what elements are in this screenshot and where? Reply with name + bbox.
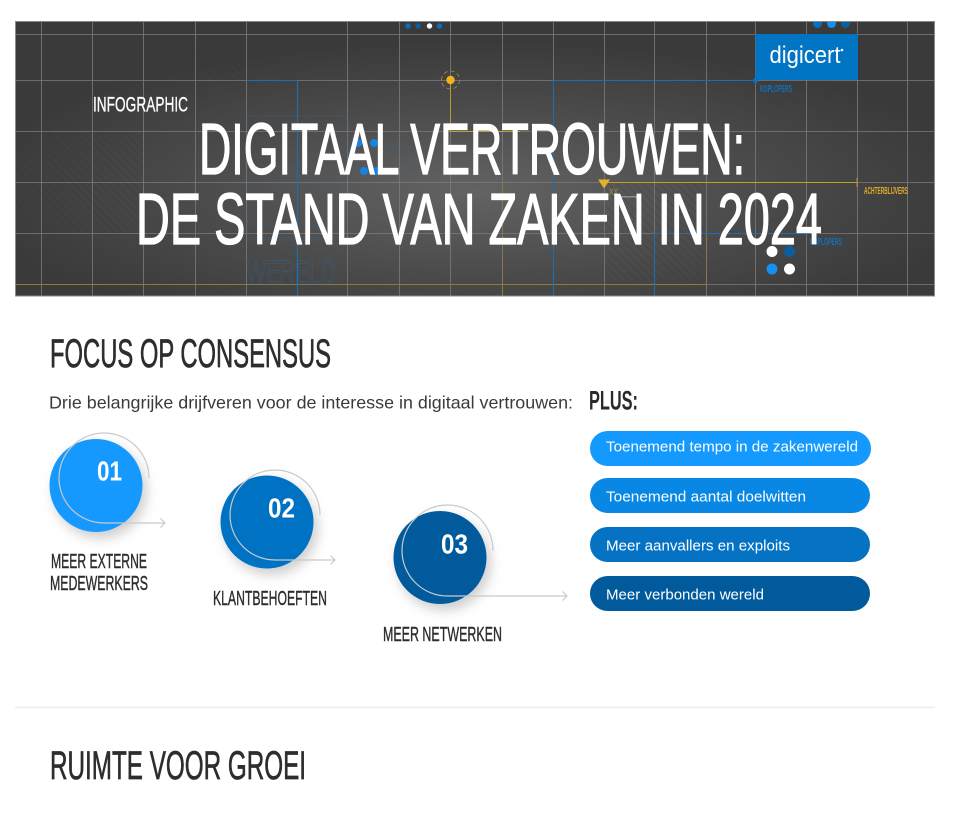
label: meer externe medewerkers <box>50 551 148 595</box>
icon: yellow target marker <box>442 71 460 89</box>
top pagination dots <box>405 23 442 29</box>
banner kicker: INFOGRAPHIC <box>93 94 188 116</box>
bottom right dots <box>766 246 795 274</box>
pill: meer aanvallers <box>590 527 870 562</box>
heading: focus op consensus: FOCUS OP CONSENSUS <box>50 332 331 376</box>
pill: meer verbonden wereld <box>590 576 870 611</box>
label: meer externe medewerkers: MEER EXTERNE <box>51 551 147 573</box>
intro text: Drie belangrijke drijfveren voor de interesse in digitaal vertrouwen: <box>49 392 573 412</box>
driver 01 <box>50 433 165 595</box>
driver 03 <box>383 505 567 646</box>
icon: yellow warning triangle <box>598 180 637 198</box>
faint outlined background words: WERELD <box>246 254 336 292</box>
pill: meer aanvallers: Meer aanvallers en exploits <box>606 538 790 554</box>
header banner: ACHTERBLIJVERS <box>864 186 908 197</box>
pill: toenemend aantal doelwitten: Toenemend aantal doelwitten <box>606 488 806 506</box>
heading: ruimte voor groei: RUIMTE VOOR GROEI <box>50 744 306 788</box>
label: klantbehoeften: KLANTBEHOEFTEN <box>213 588 327 610</box>
pill: toenemend tempo: Toenemend tempo in de zakenwereld <box>606 438 858 456</box>
label: koplopers: KOPLOPERS <box>760 84 792 95</box>
logo: digicert <box>753 34 858 83</box>
driver 03: 03 <box>441 528 468 560</box>
banner title <box>136 110 822 260</box>
pill: toenemend aantal doelwitten <box>590 478 870 513</box>
label: koplopers lower: KOPLOPERS <box>810 237 842 248</box>
logo: digicert: digicert <box>770 42 841 69</box>
label: meer externe medewerkers: MEDEWERKERS <box>50 573 148 595</box>
label: meer netwerken: MEER NETWERKEN <box>383 624 502 646</box>
top right dots <box>813 22 850 28</box>
heading: plus: PLUS: <box>589 386 638 416</box>
driver 02: 02 <box>268 492 295 524</box>
driver 01: 01 <box>97 456 122 486</box>
header banner <box>15 19 935 296</box>
pill: meer verbonden wereld: Meer verbonden wereld <box>606 586 764 604</box>
icon: yellow warning triangle: XX <box>609 187 618 197</box>
pill: toenemend tempo <box>590 431 871 466</box>
driver 02 <box>213 470 335 610</box>
